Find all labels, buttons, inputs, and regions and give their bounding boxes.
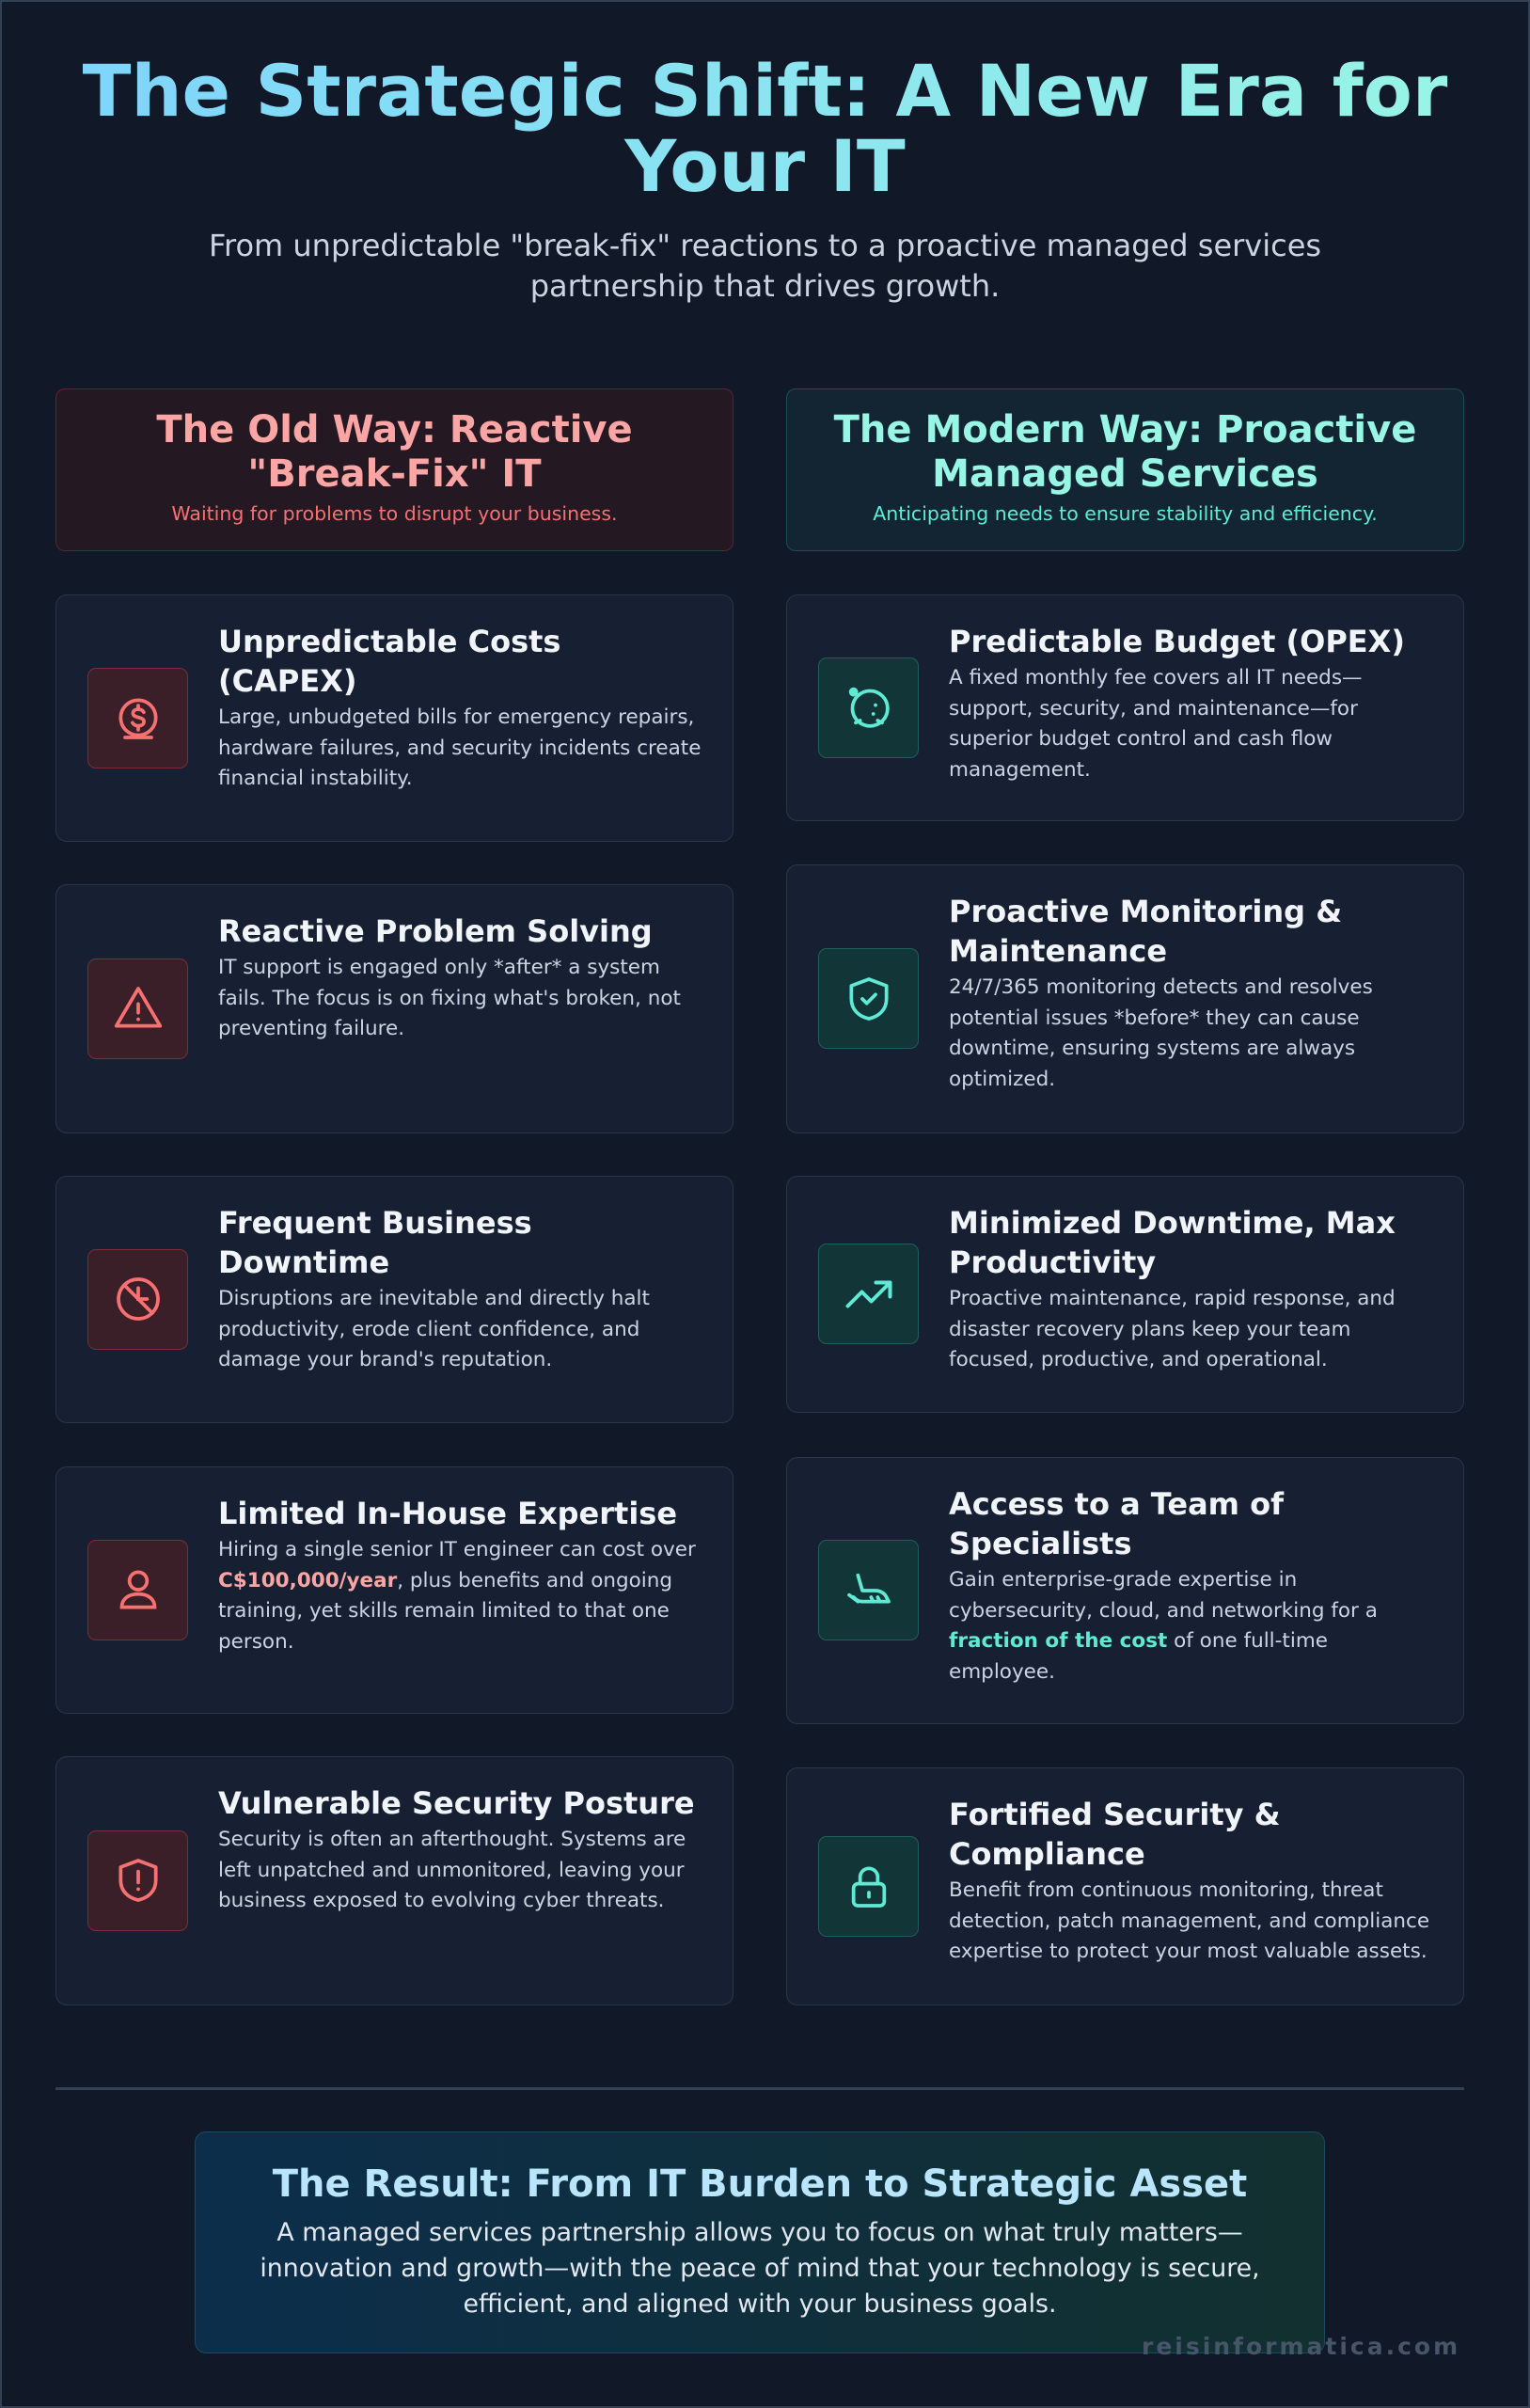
panel header: modern way [786,388,1464,551]
card: proactive monitoring: Maintenance [949,933,1167,969]
subtitle: From unpredictable "break-fix" reactions to a proactive managed services partnership that drives growth. [209,228,1321,304]
card: proactive monitoring: 24/7/365 monitoring detects and resolves potential issues *before* they can cause downtime, ensuring systems are always optimized. [949,975,1373,1091]
card: vulnerable security [55,1756,733,2005]
card: minimized downtime: Minimized Downtime, Max [949,1205,1396,1241]
card: vulnerable security: Security is often an afterthought. Systems are left unpatched and unmonitored, leaving your business exposed to evolving cyber threats. [218,1828,686,1912]
card: frequent downtime: Disruptions are inevitable and directly halt productivity, erode client confidence, and damage your brand's reputation. [218,1287,650,1371]
card: reactive problem solving: Reactive Problem Solving [218,913,653,949]
title [2,54,1528,204]
card: frequent downtime [55,1176,733,1423]
card: unpredictable costs: Large, unbudgeted bills for emergency repairs, hardware failures, and security incidents create financial instability. [218,705,701,790]
icon: trending up [818,1244,919,1344]
card: unpredictable costs: Unpredictable Costs [218,624,560,659]
title: The Strategic Shift: A New Era for [83,49,1447,133]
icon: lock [818,1836,919,1936]
panel header: old way: Waiting for problems to disrupt your business. [171,502,618,525]
panel header: modern way: Managed Services [932,452,1318,496]
icon: piggy bank [818,657,919,758]
card: predictable budget [786,594,1464,821]
card: team of specialists: Specialists [949,1526,1132,1561]
card: proactive monitoring [786,864,1464,1133]
icon: handshake [818,1540,919,1640]
panel header: old way: The Old Way: Reactive [156,408,633,452]
card: fortified security: Compliance [949,1836,1145,1872]
icon: warning [87,958,188,1059]
icon: shield check [818,948,919,1049]
card: vulnerable security: Vulnerable Security Posture [218,1785,695,1821]
card: team of specialists [786,1457,1464,1724]
card: minimized downtime: Productivity [949,1244,1156,1280]
card: proactive monitoring: Proactive Monitoring & [949,894,1342,929]
card: fortified security: Fortified Security & [949,1797,1281,1832]
card: limited expertise [55,1466,733,1714]
panel header: old way [55,388,733,551]
card: reactive problem solving [55,884,733,1133]
result heading: The Result: From IT Burden to Strategic Asset [273,2162,1247,2206]
icon: person [87,1539,188,1640]
card: unpredictable costs [55,594,733,842]
card: team of specialists: Gain enterprise-grade expertise in cybersecurity, cloud, and networking for a fraction of the cost of one full-time employee. [949,1568,1378,1684]
card: minimized downtime: Proactive maintenance, rapid response, and disaster recovery plans keep your team focused, productive, and operational. [949,1287,1396,1371]
watermark: reisinformatica.com [1142,2333,1460,2360]
card: limited expertise: Hiring a single senior IT engineer can cost over C$100,000/year, plus benefits and ongoing training, yet skills remain limited to that one person. [218,1538,696,1654]
card: frequent downtime: Frequent Business [218,1205,532,1241]
card: fortified security [786,1767,1464,2005]
card: limited expertise: Limited In-House Expertise [218,1496,677,1531]
panel header: modern way: Anticipating needs to ensure stability and efficiency. [873,502,1378,525]
card: unpredictable costs: (CAPEX) [218,663,356,699]
result box [195,2131,1325,2353]
title: Your IT [624,124,906,208]
icon: shield alert [87,1830,188,1930]
icon: clock blocked [87,1249,188,1349]
card: frequent downtime: Downtime [218,1244,389,1280]
card: team of specialists: Access to a Team of [949,1486,1284,1522]
card: minimized downtime [786,1176,1464,1413]
card: predictable budget: Predictable Budget (OPEX) [949,624,1405,659]
card: predictable budget: A fixed monthly fee covers all IT needs—support, security, and maintenance—for superior budget control and cash flow management. [949,666,1363,782]
card: reactive problem solving: IT support is engaged only *after* a system fails. The focus is on fixing what's broken, not preventing failure. [218,956,681,1040]
result text: A managed services partnership allows you to focus on what truly matters—innovation and growth—with the peace of mind that your technology is secure, efficient, and aligned with your business goals. [260,2218,1260,2319]
icon: money bag [87,668,188,768]
panel header: old way: "Break-Fix" IT [247,452,542,496]
panel header: modern way: The Modern Way: Proactive [834,408,1416,452]
card: fortified security: Benefit from continuous monitoring, threat detection, patch management, and compliance expertise to protect your most valuable assets. [949,1878,1429,1963]
